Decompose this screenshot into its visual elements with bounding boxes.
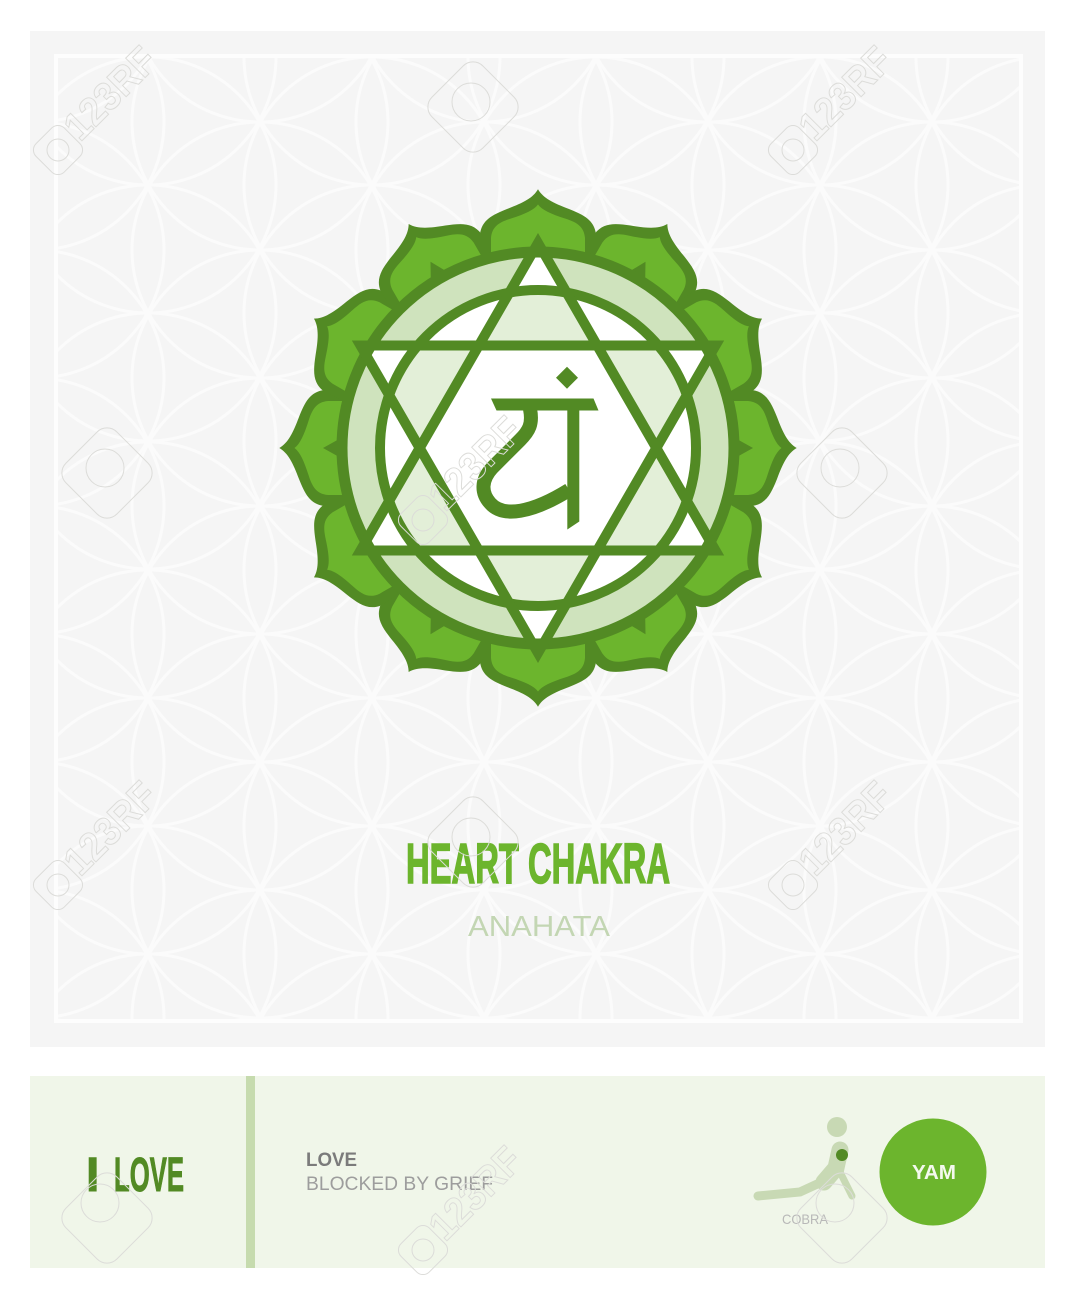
- watermark lower left: [30, 774, 166, 913]
- watermark top right: [765, 39, 901, 178]
- watermark top right: 123RF: [791, 39, 901, 149]
- watermark middle centre: 123RF: [421, 409, 531, 519]
- petal inner notches: [323, 257, 753, 639]
- panel: patterned chakra background: [30, 31, 1045, 1047]
- ring outlines: [342, 252, 734, 644]
- outer ring band: [342, 252, 734, 644]
- watermark lower left: 123RF: [56, 774, 166, 884]
- subtitle: ANAHATA: [468, 911, 611, 943]
- inner circle fill with star tips: [385, 295, 691, 601]
- watermark bottom left: [56, 1167, 158, 1269]
- affirmation: I: [86, 1149, 99, 1202]
- icon: seed syllable symbol: [483, 367, 598, 530]
- watermark middle right: [791, 422, 893, 524]
- pose label: COBRA: [782, 1211, 829, 1227]
- watermark bottom right: [791, 1167, 893, 1269]
- watermark middle left: [56, 422, 158, 524]
- watermarks: [30, 39, 901, 1278]
- affirmation: [86, 1149, 184, 1202]
- divider: [246, 1076, 255, 1268]
- watermark lower right: 123RF: [791, 774, 901, 884]
- theme: LOVE: [306, 1150, 357, 1171]
- panel: chakra details: [30, 1076, 1045, 1268]
- mantra badge: [880, 1118, 986, 1226]
- mantra badge: YAM: [912, 1162, 956, 1184]
- title: HEART CHAKRA: [406, 832, 670, 896]
- watermark top left: 123RF: [56, 39, 166, 149]
- watermark bottom centre: [395, 1139, 531, 1278]
- watermark lower centre: [422, 791, 524, 893]
- watermark middle centre: [395, 409, 531, 548]
- watermark top left: [30, 39, 166, 178]
- lotus petal outlines: [279, 189, 797, 707]
- watermark lower right: [765, 774, 901, 913]
- star tips across the ring: [360, 243, 716, 653]
- lotus petal fills: [294, 204, 782, 692]
- blockage: BLOCKED BY GRIEF: [306, 1174, 493, 1195]
- watermark top centre: [422, 56, 524, 158]
- icon: cobra pose figure: [758, 1117, 852, 1196]
- icon: heart chakra mandala: [279, 189, 797, 707]
- watermark bottom centre: 123RF: [421, 1139, 531, 1249]
- hexagram: [360, 243, 716, 653]
- affirmation: LOVE: [114, 1149, 184, 1202]
